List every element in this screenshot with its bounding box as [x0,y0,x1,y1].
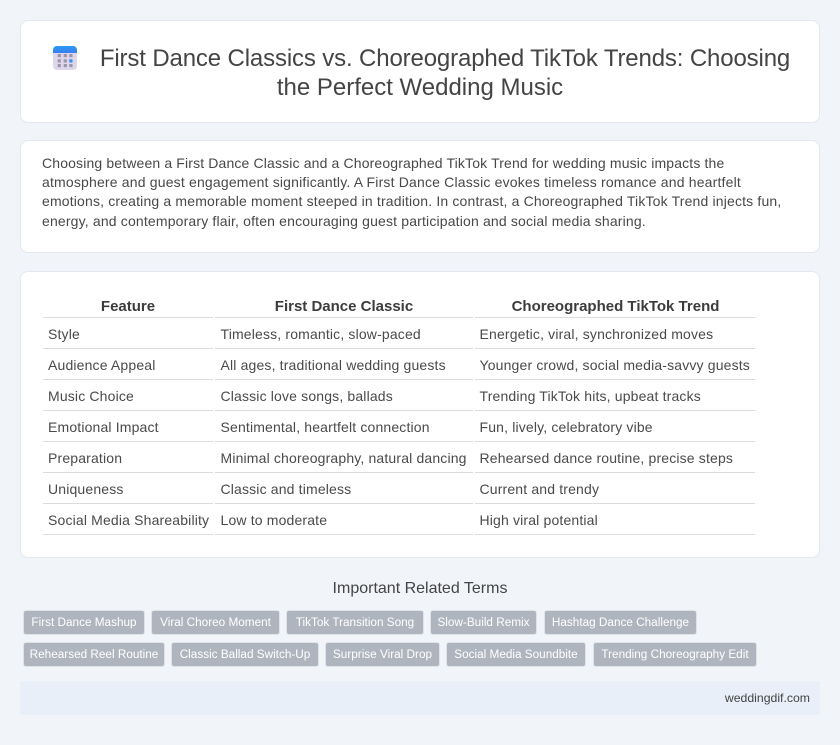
panel: comparison table [20,271,820,558]
tag [286,610,424,635]
tag: Surprise Viral Drop [333,648,432,661]
tag [171,642,319,667]
row: music choice: Music Choice [48,388,134,404]
row: social media shareability: Social Media Shareability [48,512,209,528]
tag group: related terms [23,610,757,667]
footer bar [20,681,820,715]
row: uniqueness [48,481,599,497]
text block: introduction: atmosphere and guest engagement significantly. A First Dance Classic evokes timeless romance and heartfelt [42,174,741,190]
tag [23,642,165,667]
comparison table [43,298,755,535]
row: music choice [48,388,701,404]
tag: Classic Ballad Switch-Up [180,648,310,661]
text block: introduction: emotions, creating a memorable moment steeped in tradition. In contrast, a Choreographed TikTok Trend injects fun, [42,193,781,209]
row: style [48,326,713,342]
tag: Social Media Soundbite [454,648,578,661]
tag: Trending Choreography Edit [601,648,749,661]
row: emotional impact: Sentimental, heartfelt connection [220,419,430,435]
row: audience appeal: Audience Appeal [48,357,156,373]
row: audience appeal: Younger crowd, social media-savvy guests [480,357,750,373]
heading: related terms: Important Related Terms [333,580,507,597]
title: the Perfect Wedding Music [277,74,563,101]
row: style: Timeless, romantic, slow-paced [220,326,421,342]
tag [325,642,440,667]
row: social media shareability: High viral potential [480,512,598,528]
title [100,45,790,101]
row: emotional impact: Emotional Impact [48,419,159,435]
row: emotional impact: Fun, lively, celebratory vibe [480,419,653,435]
text block: introduction: Choosing between a First Dance Classic and a Choreographed TikTok Trend for wedding music impacts the [42,154,724,170]
tag: Rehearsed Reel Routine [30,648,158,661]
text block: introduction [42,154,781,229]
row: preparation: Minimal choreography, natural dancing [220,450,467,466]
row: music choice: Trending TikTok hits, upbeat tracks [480,388,701,404]
tag [23,610,145,635]
row: emotional impact [48,419,653,435]
tag: First Dance Mashup [31,616,137,629]
tag [430,610,537,635]
row: uniqueness: Current and trendy [480,481,599,497]
row: preparation: Rehearsed dance routine, precise steps [480,450,733,466]
panel: title card [20,20,820,123]
footer text: weddingdif.com [725,691,810,705]
tag [593,642,757,667]
tag: Slow-Build Remix [437,616,530,629]
row: social media shareability: Low to moderate [220,512,327,528]
row: preparation: Preparation [48,450,122,466]
tag: TikTok Transition Song [296,616,414,629]
table header: feature: Feature [101,298,155,315]
tag [151,610,280,635]
row: uniqueness: Classic and timeless [220,481,351,497]
table header: first dance classic: First Dance Classic [275,298,413,315]
text block: introduction: energy, and contemporary flair, often encouraging guest participation and social media sharing. [42,213,646,229]
row: style: Style [48,326,80,342]
row: social media shareability [48,512,598,528]
title: First Dance Classics vs. Choreographed TikTok Trends: Choosing [100,45,790,72]
row: uniqueness: Uniqueness [48,481,124,497]
row: music choice: Classic love songs, ballads [220,388,393,404]
row: audience appeal [48,357,750,373]
tag [446,642,586,667]
table header: choreographed tiktok trend: Choreographed TikTok Trend [512,298,719,315]
panel: introduction [20,140,820,253]
tag: Viral Choreo Moment [160,616,271,629]
row: audience appeal: All ages, traditional wedding guests [220,357,446,373]
icon: calendar [53,46,77,70]
tag: Hashtag Dance Challenge [552,616,689,629]
row: style: Energetic, viral, synchronized moves [480,326,713,342]
row: preparation [48,450,733,466]
tag [544,610,697,635]
